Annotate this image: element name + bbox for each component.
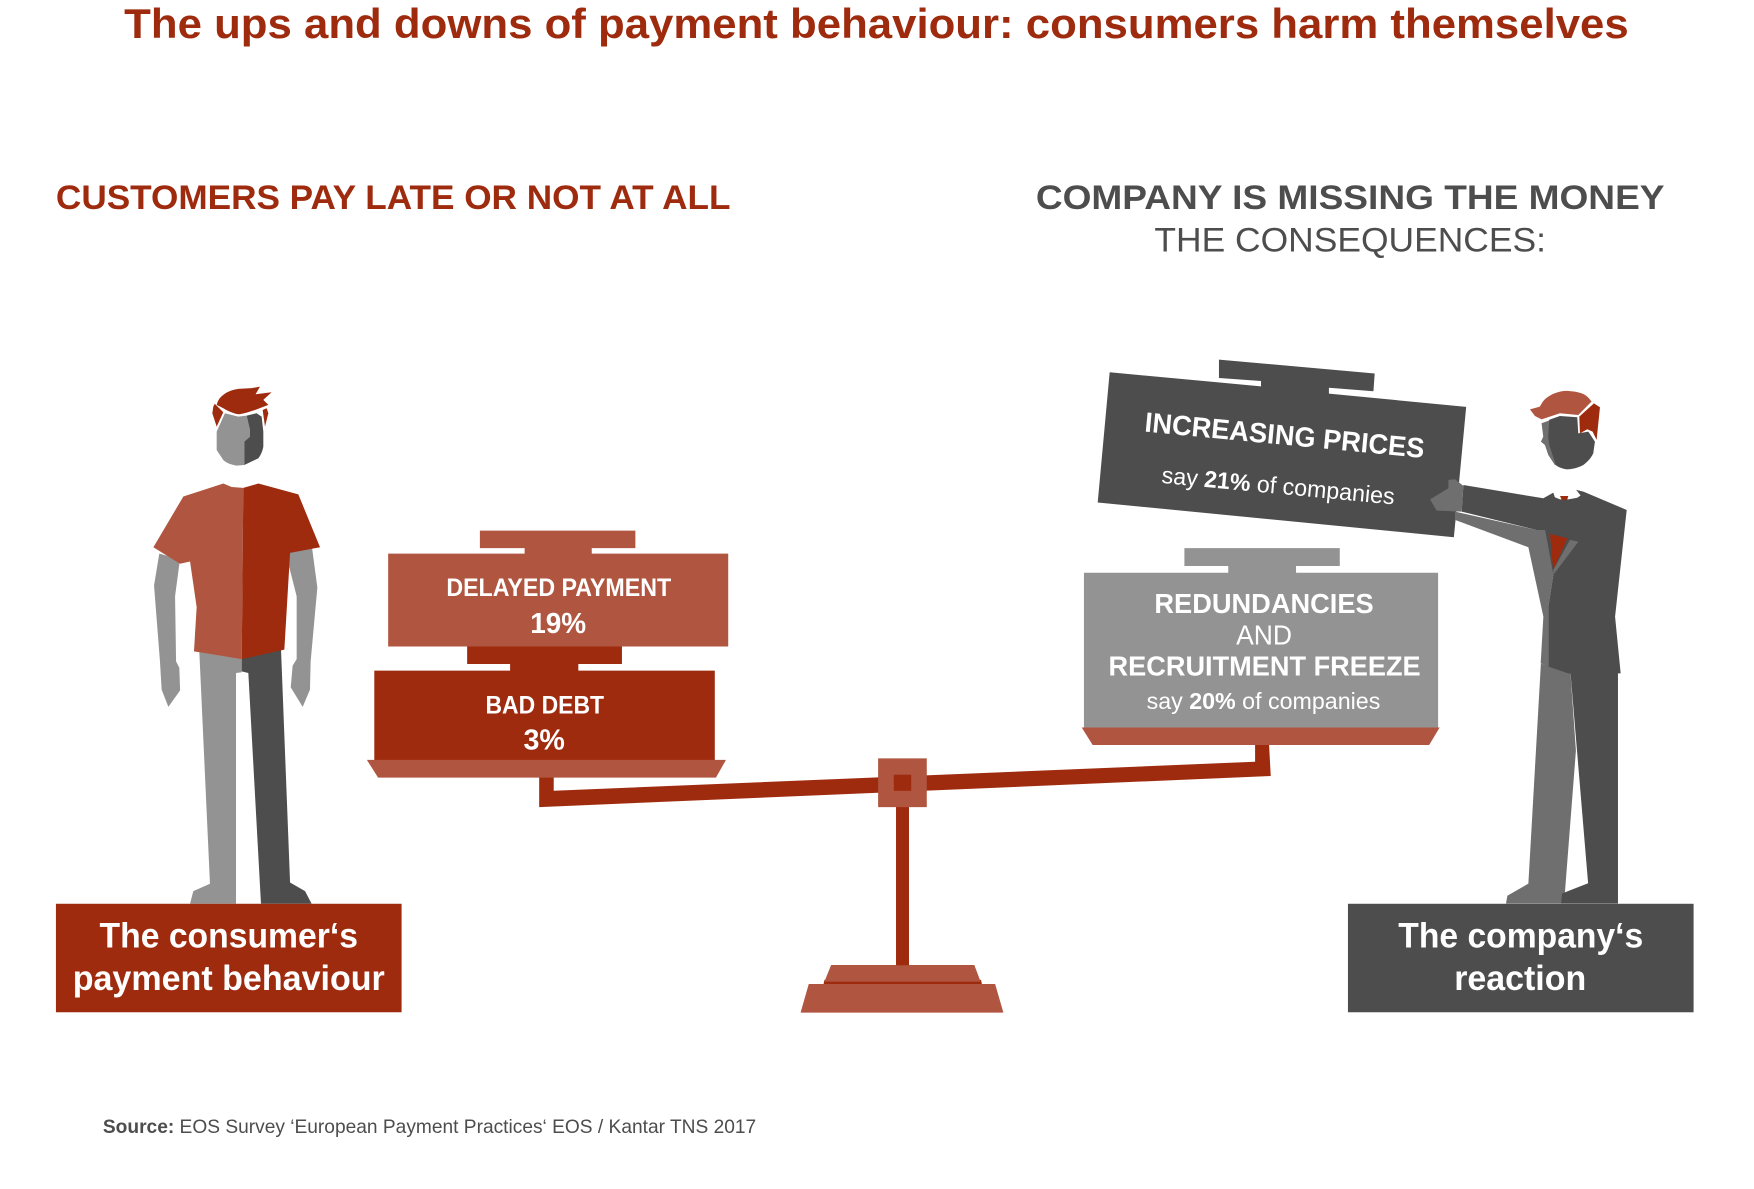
scale pole xyxy=(896,800,909,965)
weight: increasing prices: say 21% of companies xyxy=(1161,462,1396,509)
man tie xyxy=(1550,534,1567,570)
heading: company is missing the money xyxy=(1036,179,1665,260)
consumer shirt dark xyxy=(242,484,320,659)
right pan xyxy=(1082,727,1440,745)
weight: delayed payment xyxy=(388,531,728,647)
label: company's reaction xyxy=(1348,904,1694,1012)
heading: company is missing the money: THE CONSEQUENCES: xyxy=(1154,222,1546,260)
man collar knot xyxy=(1560,496,1568,500)
label: company's reaction: reaction xyxy=(1454,959,1586,998)
consumer trousers light xyxy=(190,652,242,904)
consumer face dark xyxy=(244,413,263,465)
consumer right arm xyxy=(288,548,317,707)
left pan xyxy=(367,760,726,778)
consumer left arm xyxy=(154,554,180,707)
heading: customers pay late: CUSTOMERS PAY LATE OR NOT AT ALL xyxy=(56,179,730,217)
man grey sleeve and body xyxy=(1455,512,1553,667)
weight: redundancies and recruitment freeze: say 20% of companies xyxy=(1147,688,1380,714)
consumer shirt light xyxy=(153,484,243,659)
man hair light xyxy=(1530,391,1592,419)
title: The ups and downs of payment behaviour: consumers harm themselves xyxy=(124,1,1629,47)
man hand xyxy=(1430,479,1463,512)
weight: redundancies and recruitment freeze xyxy=(1084,548,1438,727)
consumer face light xyxy=(217,413,250,466)
weight: bad debt: BAD DEBT xyxy=(485,692,605,720)
weight: increasing prices: INCREASING PRICES xyxy=(1143,407,1426,464)
source note: Source: EOS Survey ‘European Payment Practices‘ EOS / Kantar TNS 2017 xyxy=(103,1116,756,1138)
weight: bad debt: 3% xyxy=(524,724,565,756)
heading: company is missing the money: COMPANY IS MISSING THE MONEY xyxy=(1036,179,1665,217)
man jacket xyxy=(1462,485,1627,673)
weight: bad debt xyxy=(374,647,715,760)
weight: redundancies and recruitment freeze: REDUNDANCIES xyxy=(1154,588,1374,619)
weight: delayed payment: DELAYED PAYMENT xyxy=(446,574,672,602)
label: consumer's payment behaviour: The consumer‘s xyxy=(100,916,358,955)
man face shadow xyxy=(1541,420,1557,465)
man shirt front xyxy=(1545,530,1578,575)
man grey leg xyxy=(1506,664,1576,904)
scale base xyxy=(823,980,982,985)
figure: consumer xyxy=(153,387,320,904)
man hair dark xyxy=(1579,403,1600,440)
scale pivot xyxy=(878,758,927,807)
man face xyxy=(1548,416,1595,469)
figure: company man xyxy=(1430,391,1627,904)
label: company's reaction: The company‘s xyxy=(1398,916,1643,955)
man lapel xyxy=(1553,540,1578,575)
scale xyxy=(367,727,1440,1013)
consumer hair xyxy=(212,387,272,427)
weight: redundancies and recruitment freeze: AND xyxy=(1236,619,1292,650)
weight: delayed payment: 19% xyxy=(530,608,586,640)
weight: redundancies and recruitment freeze: RECRUITMENT FREEZE xyxy=(1109,651,1421,682)
scale beam xyxy=(539,745,1271,807)
label: consumer's payment behaviour xyxy=(56,904,402,1012)
weight: increasing prices xyxy=(1098,360,1466,537)
label: consumer's payment behaviour: payment behaviour xyxy=(73,959,385,998)
man dark leg xyxy=(1561,672,1618,904)
consumer trousers dark xyxy=(242,649,312,904)
